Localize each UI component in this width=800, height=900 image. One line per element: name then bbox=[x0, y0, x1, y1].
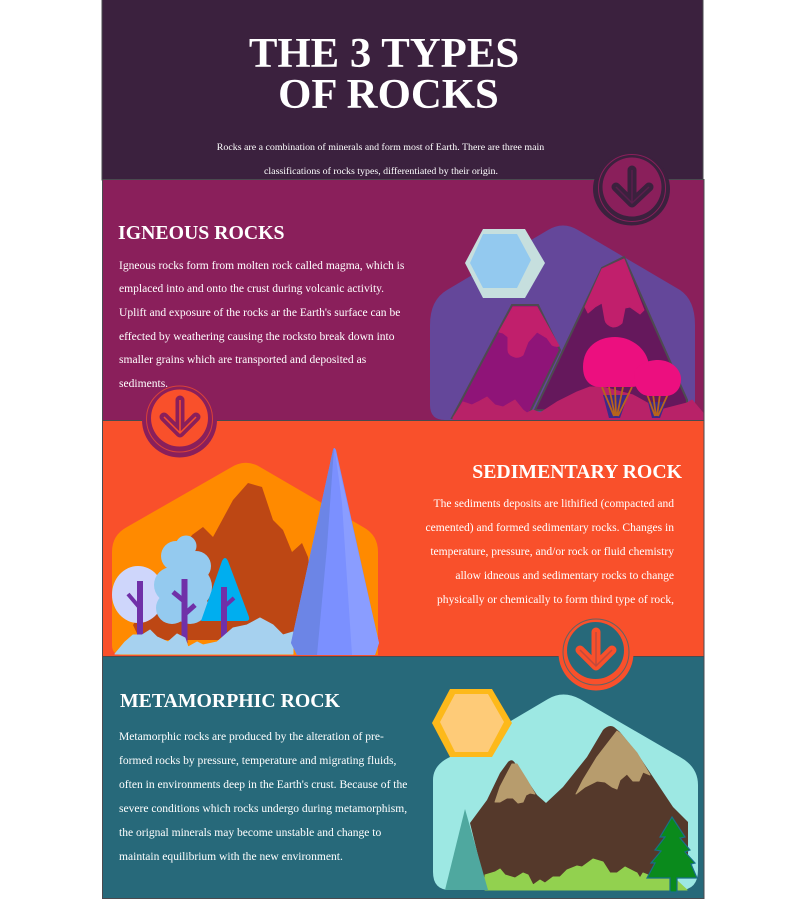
illustration: mountains bbox=[432, 689, 698, 892]
metamorphic body text: severe conditions which rocks undergo during metamorphism, bbox=[119, 803, 407, 815]
intro text: classifications of rocks types, differentiated by their origin. bbox=[264, 166, 498, 177]
sedimentary body text: physically or chemically to form third type of rock, bbox=[437, 594, 674, 606]
metamorphic heading: METAMORPHIC ROCK bbox=[120, 690, 341, 712]
sedimentary body text: temperature, pressure, and/or rock or fluid chemistry bbox=[430, 546, 674, 558]
sedimentary body text: The sediments deposits are lithified (compacted and bbox=[434, 498, 674, 510]
metamorphic body text: maintain equilibrium with the new environment. bbox=[119, 851, 343, 863]
metamorphic body text: the orignal minerals may become unstable and change to bbox=[119, 827, 382, 839]
icon: arrow badge 1 bbox=[593, 152, 670, 226]
illustration: sedimentary mountains bbox=[112, 448, 379, 655]
sedimentary body text: cemented) and formed sedimentary rocks. Changes in bbox=[426, 522, 674, 534]
icon: arrow badge 3 bbox=[558, 616, 634, 690]
metamorphic body text: often in environments deep in the Earth's crust. Because of the bbox=[119, 779, 407, 791]
igneous body text: Igneous rocks form from molten rock called magma, which is bbox=[119, 260, 405, 272]
panel: igneous rocks bbox=[102, 180, 704, 420]
igneous body text: emplaced into and onto the crust during volcanic activity. bbox=[119, 283, 384, 295]
title: THE 3 TYPES bbox=[249, 30, 519, 77]
metamorphic body text: Metamorphic rocks are produced by the alteration of pre- bbox=[119, 731, 384, 743]
igneous body text: sediments. bbox=[119, 378, 168, 390]
metamorphic body text: formed rocks by pressure, temperature and migrating fluids, bbox=[119, 755, 396, 767]
intro text: Rocks are a combination of minerals and form most of Earth. There are three main bbox=[217, 142, 544, 153]
sedimentary body text: allow idneous and sedimentary rocks to change bbox=[455, 570, 674, 582]
illustration: volcanoes bbox=[430, 226, 703, 420]
icon: arrow badge 2 bbox=[142, 382, 217, 458]
sedimentary body text bbox=[426, 498, 674, 606]
igneous body text: effected by weathering causing the rocksto break down into bbox=[119, 331, 395, 343]
panel: metamorphic rock bbox=[102, 656, 704, 898]
panel: header bbox=[102, 0, 703, 180]
igneous body text: Uplift and exposure of the rocks ar the Earth's surface can be bbox=[119, 307, 400, 319]
metamorphic body text bbox=[119, 731, 407, 863]
panel: sedimentary rock bbox=[102, 420, 704, 656]
title: OF ROCKS bbox=[278, 71, 499, 118]
sedimentary heading: SEDIMENTARY ROCK bbox=[472, 461, 683, 483]
igneous body text: smaller grains which are transported and deposited as bbox=[119, 354, 367, 366]
intro text bbox=[217, 142, 544, 177]
title bbox=[249, 30, 519, 118]
igneous heading: IGNEOUS ROCKS bbox=[118, 222, 285, 244]
igneous body text bbox=[119, 260, 405, 390]
